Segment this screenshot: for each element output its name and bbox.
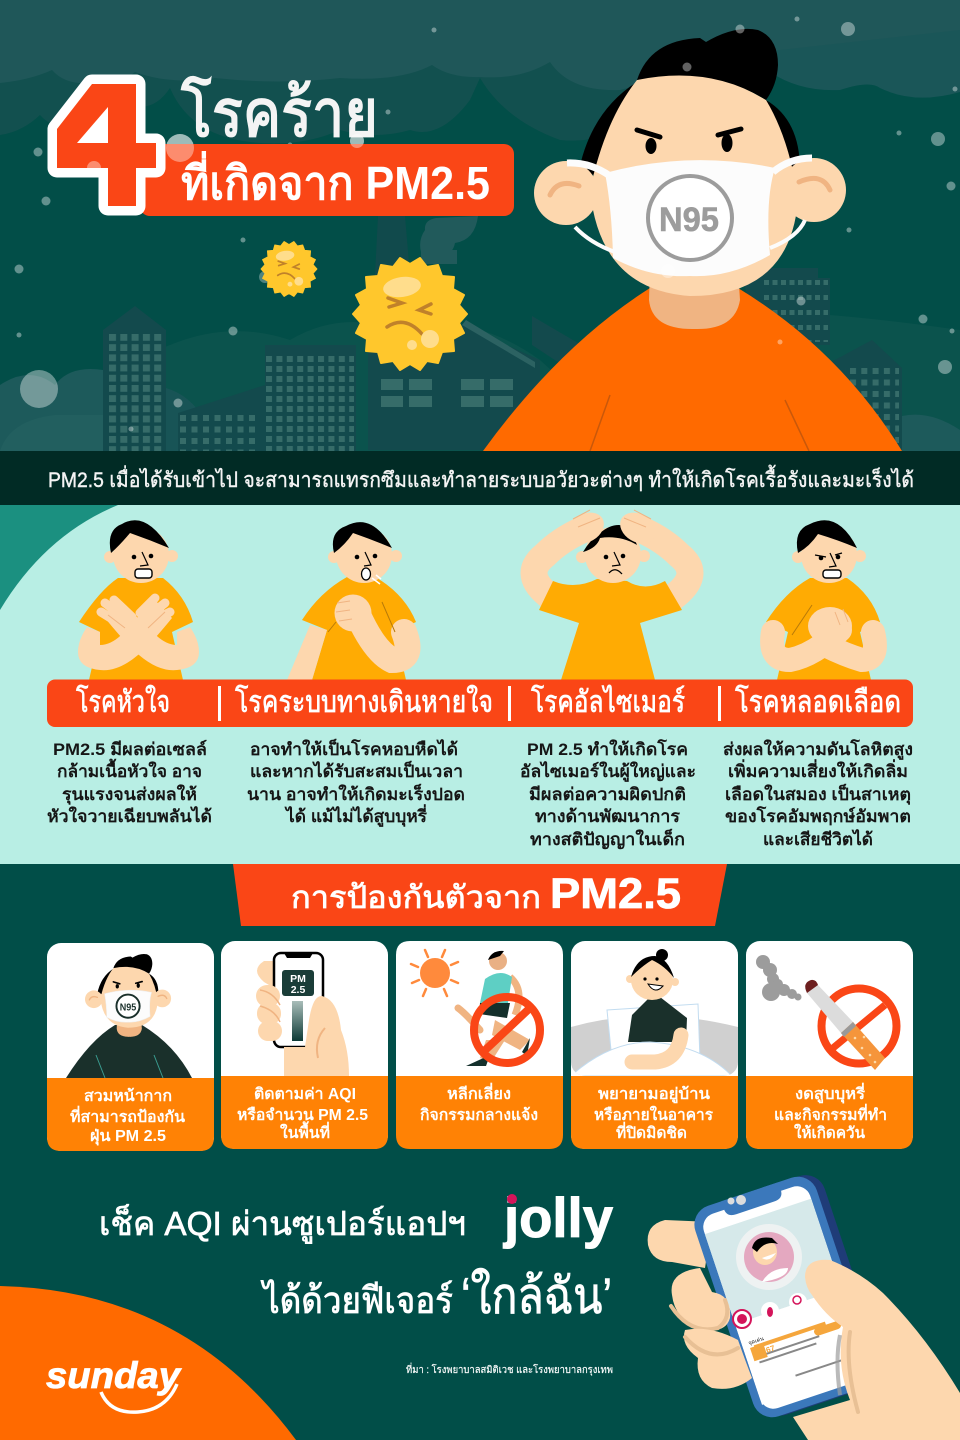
app icons — [733, 1293, 807, 1328]
phone body — [689, 1169, 889, 1424]
app promo: line 2 — [260, 1268, 612, 1324]
text: vascular disease: ส่งผลให้ความดันโลหิตสูง — [723, 739, 913, 761]
disease heading bar: โรคอัลไซเมอร์ — [531, 684, 685, 719]
small dust behind virus — [259, 271, 271, 283]
card: stop smoking: ให้เกิดควัน — [794, 1123, 865, 1142]
card: stay indoors — [571, 941, 738, 1149]
heading: prevention: การป้องกันตัวจาก — [291, 880, 541, 915]
icon: smoke — [756, 955, 802, 1001]
neck — [649, 270, 740, 329]
icon: sun — [411, 950, 458, 996]
illustration: hand holding phone with jolly app — [648, 1169, 960, 1440]
card: stop smoking — [746, 941, 913, 1149]
ears — [534, 161, 598, 225]
figure: Alzheimer's disease — [534, 506, 690, 680]
card: track AQI: หรือจำนวน PM 2.5 — [237, 1106, 368, 1124]
text: vascular disease — [723, 739, 913, 849]
text: Alzheimer's disease: ทางด้านพัฒนาการ — [535, 807, 681, 826]
text: heart disease — [47, 739, 212, 826]
low building — [178, 385, 265, 451]
big number 4 — [57, 84, 156, 206]
text: vascular disease: ของโรคอัมพฤกษ์อัมพาต — [725, 806, 911, 826]
left clouds — [0, 369, 103, 451]
title dust overlay — [87, 134, 364, 175]
app promo: line 1: เช็ค AQI ผ่านซูเปอร์แอปฯ — [99, 1204, 466, 1244]
airborne dust particles — [14, 16, 958, 432]
card: stay indoors: ที่ปิดมิดชิด — [616, 1121, 687, 1142]
figure: person wearing N95 mask: N95 — [659, 201, 719, 239]
icon: prohibition sign — [474, 997, 540, 1063]
card: wear a mask: ฝุ่น PM 2.5 — [90, 1128, 166, 1146]
brows and eyes — [637, 129, 741, 137]
text: vascular disease: และเสียชีวิตได้ — [763, 829, 873, 849]
title line 1: โรคร้าย — [181, 76, 378, 150]
corner: sunday brand shape — [0, 1286, 296, 1440]
face — [590, 73, 798, 296]
text: respiratory disease: อาจทำให้เป็นโรคหอบหืดได้ — [250, 737, 458, 759]
card: stop smoking: งดสูบบุหรี่ — [795, 1082, 866, 1105]
icon: small angry virus — [261, 242, 317, 296]
figure: person wearing N95 mask — [483, 29, 902, 451]
text: Alzheimer's disease: ทางสติปัญญาในเด็ก — [530, 827, 685, 850]
tower left — [103, 306, 166, 451]
text: vascular disease: เพิ่มความเสี่ยงให้เกิดลิ่ม — [728, 759, 908, 781]
app avatar — [736, 1224, 802, 1290]
text: Alzheimer's disease: มีผลต่อความผิดปกติ — [529, 784, 686, 804]
app promo: line 2: ‘ใกล้ฉัน’ — [461, 1268, 612, 1324]
tower centre — [265, 345, 356, 451]
card: track AQI — [221, 941, 388, 1149]
text: Alzheimer's disease: PM 2.5 ทำให้เกิดโรค — [527, 739, 688, 759]
right building behind figure — [740, 268, 830, 345]
title line 2: ที่เกิดจาก PM2.5 — [181, 151, 490, 209]
panel: hero background — [0, 0, 960, 451]
app AQI card — [748, 1320, 842, 1361]
text: respiratory disease: นาน อาจทำให้เกิดมะเร็งปอด — [247, 782, 465, 804]
figure: heart disease — [78, 520, 199, 680]
source note: ที่มา : โรงพยาบาลสมิติเวช และโรงพยาบาลกรุงเทพ — [406, 1362, 613, 1376]
text: respiratory disease: และหากได้รับสะสมเป็นเวลา — [250, 759, 463, 781]
card: stay indoors: พยายามอยู่บ้าน — [598, 1085, 710, 1105]
logo: sunday: sunday — [46, 1355, 182, 1396]
card: avoid outdoor activity: หลีกเลี่ยง — [447, 1082, 511, 1103]
card: track AQI: ติดตามค่า AQI — [254, 1085, 356, 1103]
illustration: masked person: N95 — [120, 1002, 136, 1013]
illustration: hand holding phone: 2.5 — [291, 984, 305, 996]
text: heart disease: PM2.5 มีผลต่อเซลล์ — [53, 739, 207, 759]
text: heart disease: รุนแรงจนส่งผลให้ — [62, 784, 197, 805]
disease heading bar: โรคหลอดเลือด — [735, 684, 901, 719]
icon: cigarette — [805, 980, 885, 1070]
panel: prevention background — [0, 864, 960, 1440]
thumb and arm — [793, 1260, 960, 1440]
illustration: hand holding phone: PM — [290, 973, 306, 985]
factory building — [368, 316, 590, 450]
card: avoid outdoor activity — [396, 941, 563, 1149]
card: wear a mask: ที่สามารถป้องกัน — [70, 1105, 185, 1126]
gripping fingers — [672, 1268, 730, 1330]
title bar — [140, 144, 514, 216]
figure: running person — [458, 951, 530, 1066]
back hair — [578, 80, 800, 175]
icon: large angry virus — [353, 258, 467, 370]
text: heart disease: กล้ามเนื้อหัวใจ อาจ — [57, 758, 202, 781]
text: heart disease: หัวใจวายเฉียบพลันได้ — [47, 806, 212, 826]
top hair — [637, 29, 778, 100]
factory chimney and smoke — [375, 216, 478, 275]
icon: prohibition sign — [822, 988, 896, 1064]
card: stay indoors: หรือภายในอาคาร — [594, 1105, 714, 1124]
text: respiratory disease — [247, 737, 465, 828]
logo: jolly: jolly — [503, 1186, 613, 1249]
illustration: hand holding phone — [256, 953, 349, 1076]
card: avoid outdoor activity: กิจกรรมกลางแจ้ง — [420, 1106, 538, 1124]
far right tower — [820, 340, 902, 451]
banner: intro statement — [0, 451, 960, 505]
figure: respiratory disease — [287, 522, 416, 680]
logo: sunday — [46, 1355, 182, 1412]
mask — [605, 160, 775, 276]
card: stop smoking: และกิจกรรมที่ทำ — [774, 1103, 887, 1124]
index finger — [648, 1220, 712, 1268]
disease heading bar: โรคหัวใจ — [76, 684, 170, 719]
panel: diseases — [0, 505, 960, 864]
mask straps — [567, 158, 812, 176]
app promo: line 2: ได้ด้วยฟีเจอร์ — [260, 1279, 453, 1321]
card: wear a mask: สวมหน้ากาก — [84, 1087, 172, 1105]
background hills — [90, 315, 960, 451]
disease heading bar — [47, 680, 913, 727]
card: wear a mask — [47, 943, 214, 1151]
text: vascular disease: เลือดในสมอง เป็นสาเหตุ — [725, 782, 911, 805]
illustration: person in bed — [571, 949, 738, 1076]
card: track AQI: ในพื้นที่ — [280, 1121, 330, 1142]
app AQI card: 67 — [765, 1343, 777, 1355]
text: respiratory disease: ได้ แม้ไม่ได้สูบบุหรี่ — [284, 804, 428, 828]
banner: intro statement: PM2.5 เมื่อได้รับเข้าไป จะสามารถแทรกซึมและทำลายระบบอวัยวะต่างๆ ทำให้เกิดโรคเรื้อรังและมะเร็งได้ — [48, 465, 914, 492]
illustration: masked person — [66, 954, 192, 1078]
cityscape — [0, 216, 960, 451]
smog clouds — [0, 0, 960, 144]
heading: prevention — [233, 864, 727, 926]
text: Alzheimer's disease: อัลไซเมอร์ในผู้ใหญ่และ — [520, 761, 696, 783]
app AQI card: จุดเด่น — [748, 1336, 765, 1347]
shirt — [483, 288, 902, 451]
figure: vascular disease — [766, 520, 880, 680]
disease heading bar: โรคระบบทางเดินหายใจ — [235, 684, 493, 719]
heading: prevention: PM2.5 — [550, 870, 681, 918]
text: Alzheimer's disease — [520, 739, 696, 850]
